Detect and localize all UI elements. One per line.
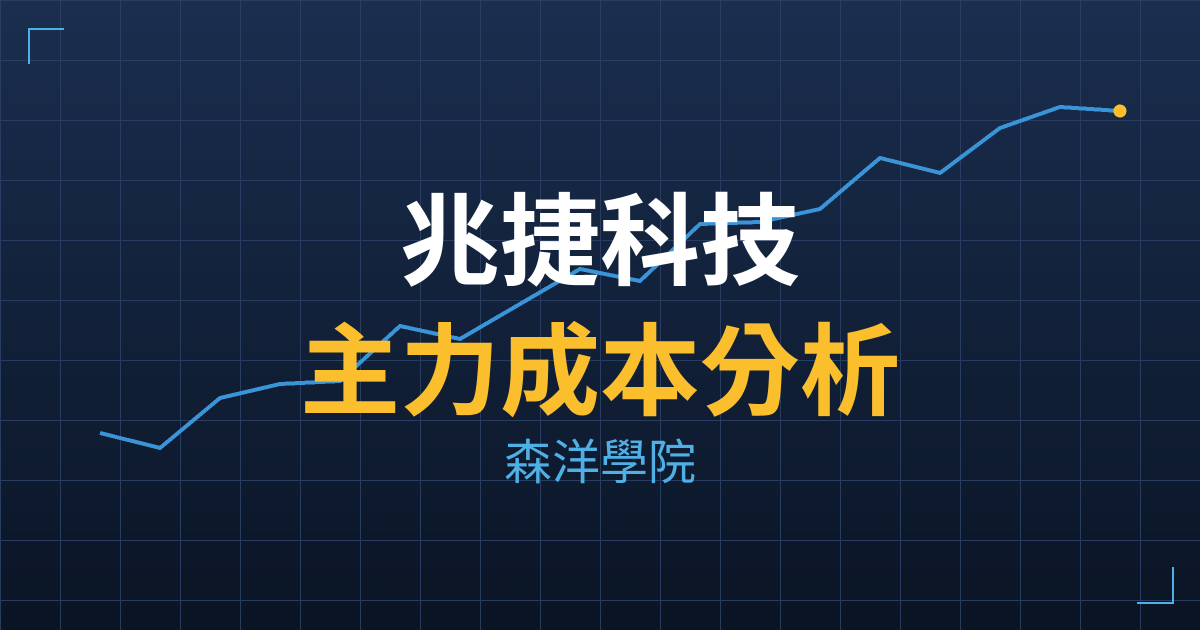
corner bracket: bottom right	[1137, 567, 1173, 603]
latest price marker	[1114, 104, 1126, 118]
corner bracket: top left	[29, 29, 64, 64]
title: 兆捷科技	[400, 187, 800, 299]
brand name: 森洋學院	[504, 437, 696, 490]
subtitle: 主力成本分析	[300, 317, 900, 429]
price line chart	[100, 104, 1126, 448]
